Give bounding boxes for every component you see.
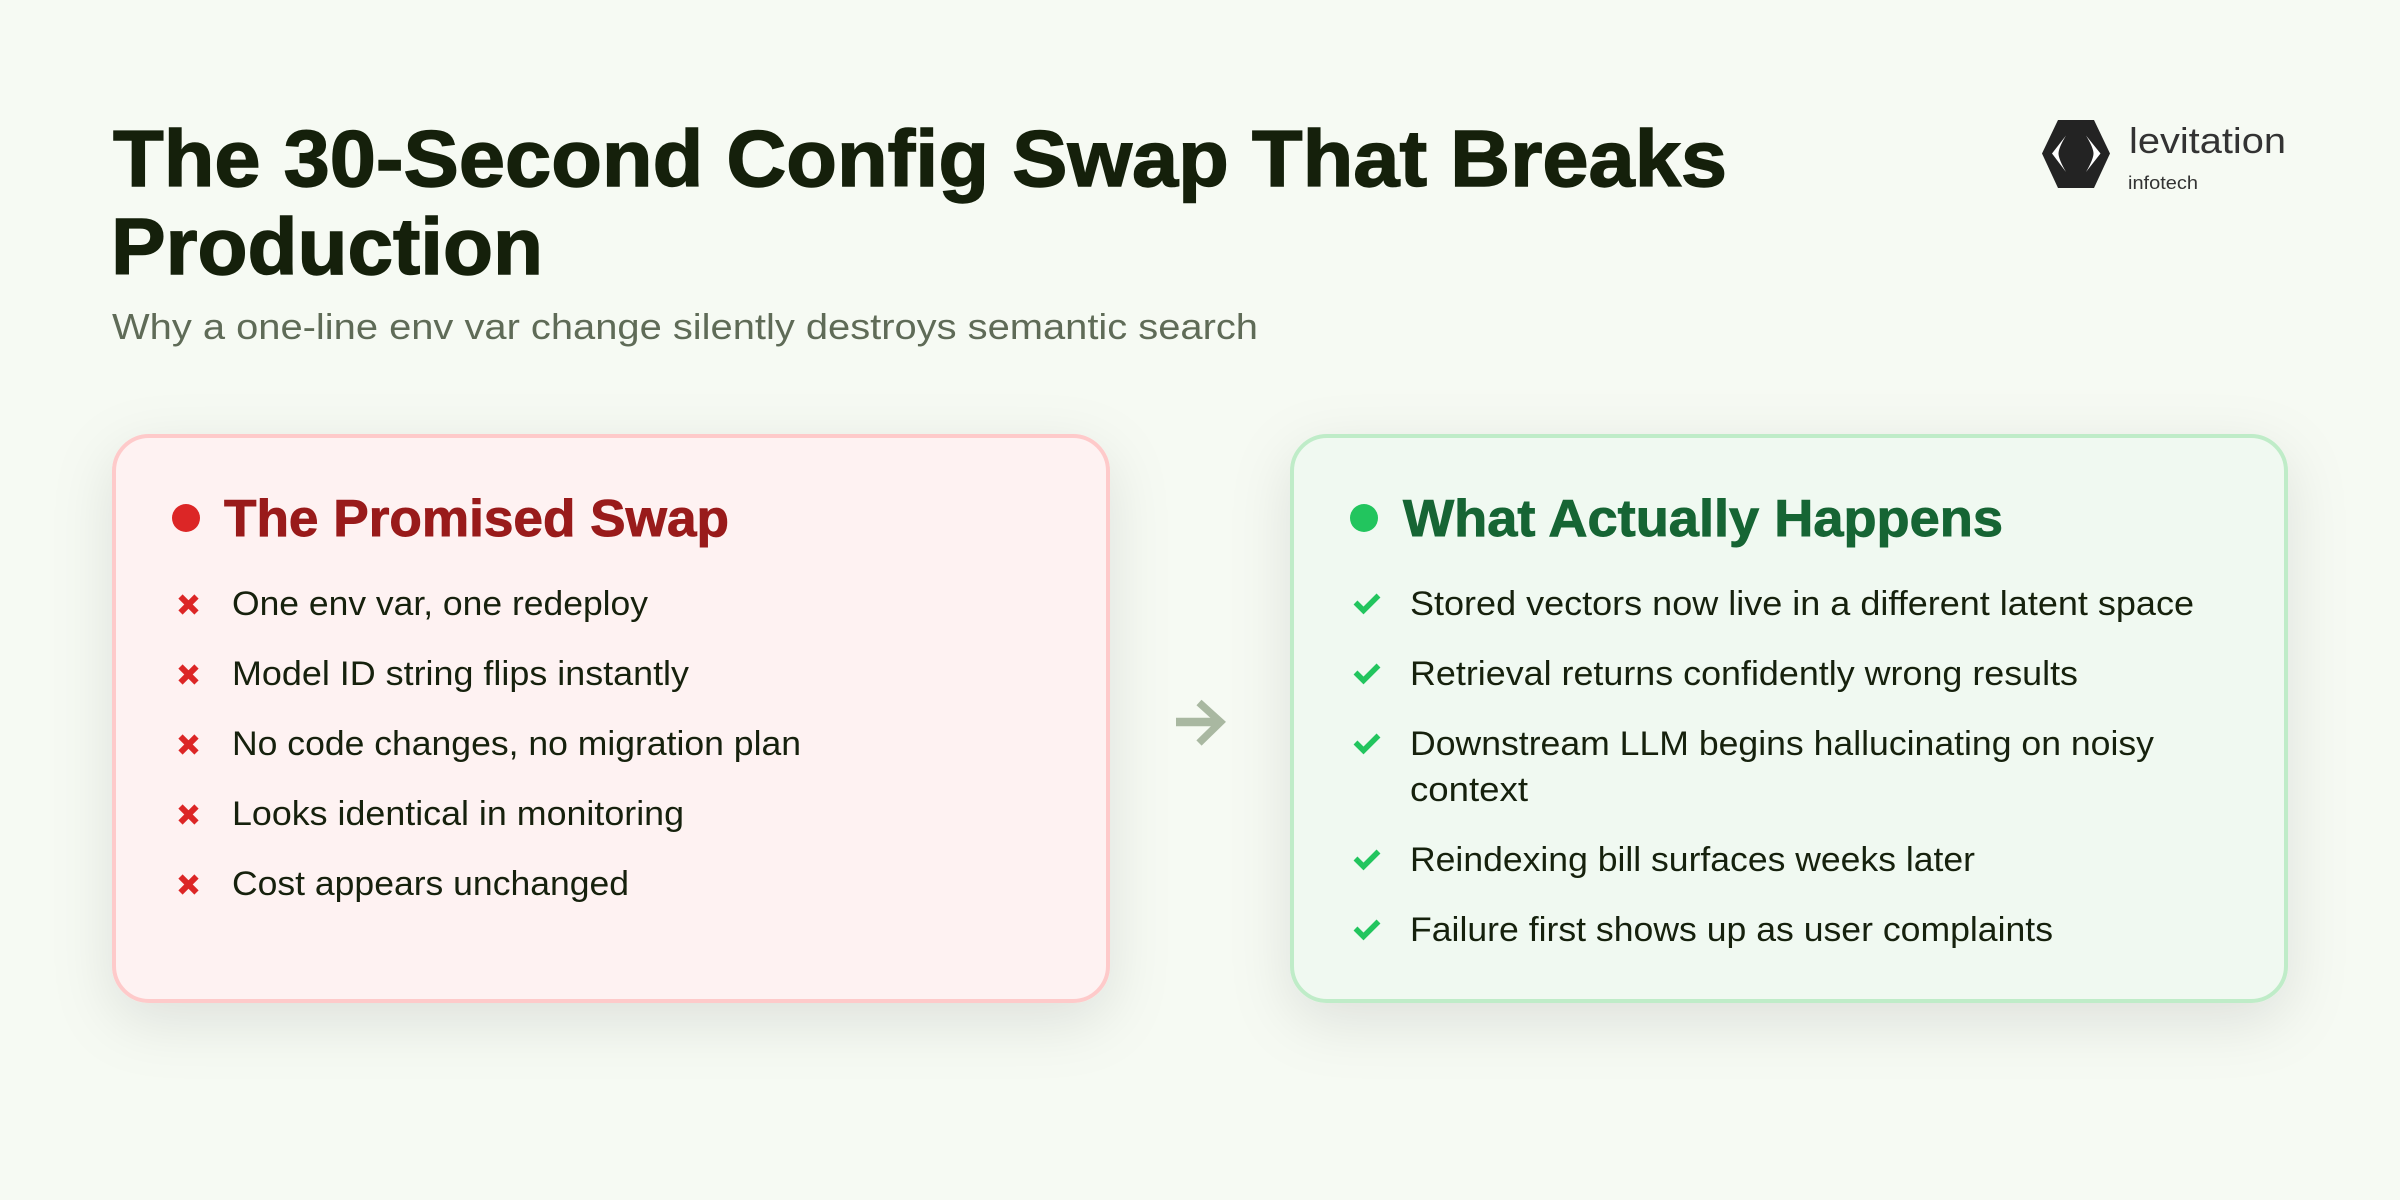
icon: red dot <box>172 504 200 532</box>
item: downstream llm: Downstream LLM begins hallucinating on noisy <box>1410 725 2155 763</box>
wordmark: levitation <box>2129 120 2286 161</box>
list: promised items <box>180 585 801 903</box>
item: downstream llm <box>1356 725 2155 809</box>
item: retrieval: Retrieval returns confidently wrong results <box>1410 655 2078 693</box>
panel: the promised swap <box>114 436 1108 1001</box>
title: The 30-Second Config Swap That Breaks <box>113 114 1727 203</box>
icon: green dot <box>1350 504 1378 532</box>
logo: levitation infotech <box>2042 120 2286 193</box>
panel: what actually happens <box>1292 436 2286 1001</box>
item: downstream llm: context <box>1410 771 1528 809</box>
item: failure: Failure first shows up as user complaints <box>1410 911 2053 949</box>
tagline: infotech <box>2128 172 2198 193</box>
item: stored vectors: Stored vectors now live in a different latent space <box>1410 585 2194 623</box>
heading: the promised swap: The Promised Swap <box>224 490 729 548</box>
item: one env var: One env var, one redeploy <box>232 585 649 623</box>
list: actual items <box>1356 585 2194 949</box>
item: no code changes: No code changes, no migration plan <box>232 725 801 763</box>
heading: what actually happens: What Actually Happens <box>1403 490 2003 548</box>
subtitle: Why a one-line env var change silently destroys semantic search <box>112 306 1258 347</box>
item: reindexing: Reindexing bill surfaces weeks later <box>1410 841 1975 879</box>
title: Production <box>111 202 543 291</box>
arrow <box>1176 702 1220 743</box>
icon: hexagon with chevrons <box>2042 120 2110 188</box>
title <box>111 114 1727 291</box>
item: cost: Cost appears unchanged <box>232 865 629 903</box>
item: model id: Model ID string flips instantly <box>232 655 690 693</box>
item: monitoring: Looks identical in monitoring <box>232 795 684 833</box>
